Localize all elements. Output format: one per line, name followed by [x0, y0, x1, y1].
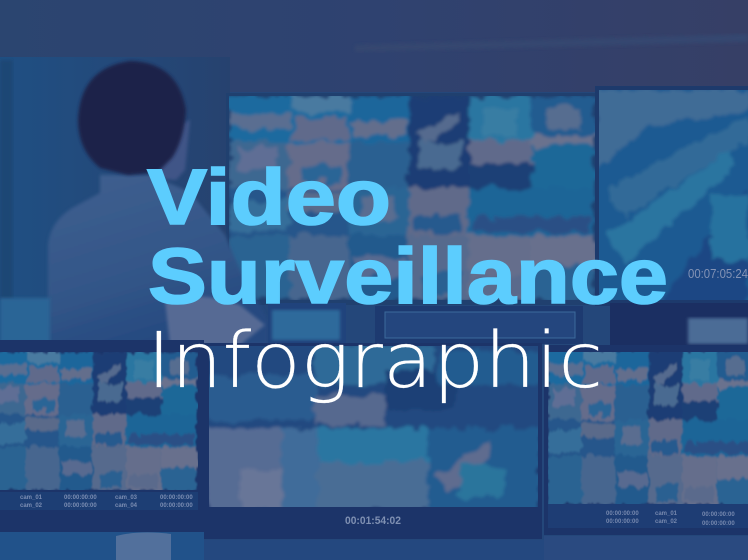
- monitor: bottom right: 00:00:00:00: [702, 512, 735, 518]
- monitor: bottom left: 00:00:00:00: [64, 495, 97, 501]
- monitor: bottom right: 00:00:00:00: [606, 519, 639, 525]
- coffee cup: [116, 532, 171, 560]
- title line: Surveillance: Surveillance: [148, 231, 668, 320]
- hand: [165, 296, 265, 345]
- ceiling light fixture: [355, 34, 748, 52]
- monitor: bottom left: 00:00:00:00: [160, 503, 193, 509]
- title line: Video: Video: [147, 152, 391, 241]
- timecode: 00:01:54:02: [345, 515, 401, 527]
- title: [147, 152, 668, 406]
- monitor: bottom left: cam_02: [20, 503, 43, 509]
- face: [150, 120, 190, 180]
- monitor: bottom right: cam_01: [655, 511, 678, 517]
- monitor: bottom left: cam_03: [115, 495, 138, 501]
- ceiling: [0, 0, 748, 92]
- hair: [78, 61, 186, 175]
- wall: [0, 57, 230, 347]
- middle back monitors: [0, 298, 748, 345]
- monitor: bottom left: 00:00:00:00: [64, 503, 97, 509]
- monitor: bottom center: [200, 340, 545, 539]
- person: [48, 61, 268, 345]
- monitor: bottom right: 00:00:00:00: [702, 521, 735, 527]
- monitor: bottom right: cam_02: [655, 519, 678, 525]
- desk: [0, 532, 748, 560]
- monitor: top right: [595, 85, 748, 310]
- monitor: bottom left: [0, 340, 204, 532]
- monitor: bottom right: 00:00:00:00: [606, 511, 639, 517]
- monitor: bottom left: cam_01: [20, 495, 43, 501]
- shirt: [48, 175, 268, 345]
- left dark strip: [0, 60, 13, 300]
- monitor: bottom right: [544, 345, 748, 535]
- monitor: top center: [226, 93, 598, 305]
- monitor: bottom left: 00:00:00:00: [160, 495, 193, 501]
- title line: Infographic: Infographic: [147, 317, 603, 406]
- monitor: bottom left: cam_04: [115, 503, 138, 509]
